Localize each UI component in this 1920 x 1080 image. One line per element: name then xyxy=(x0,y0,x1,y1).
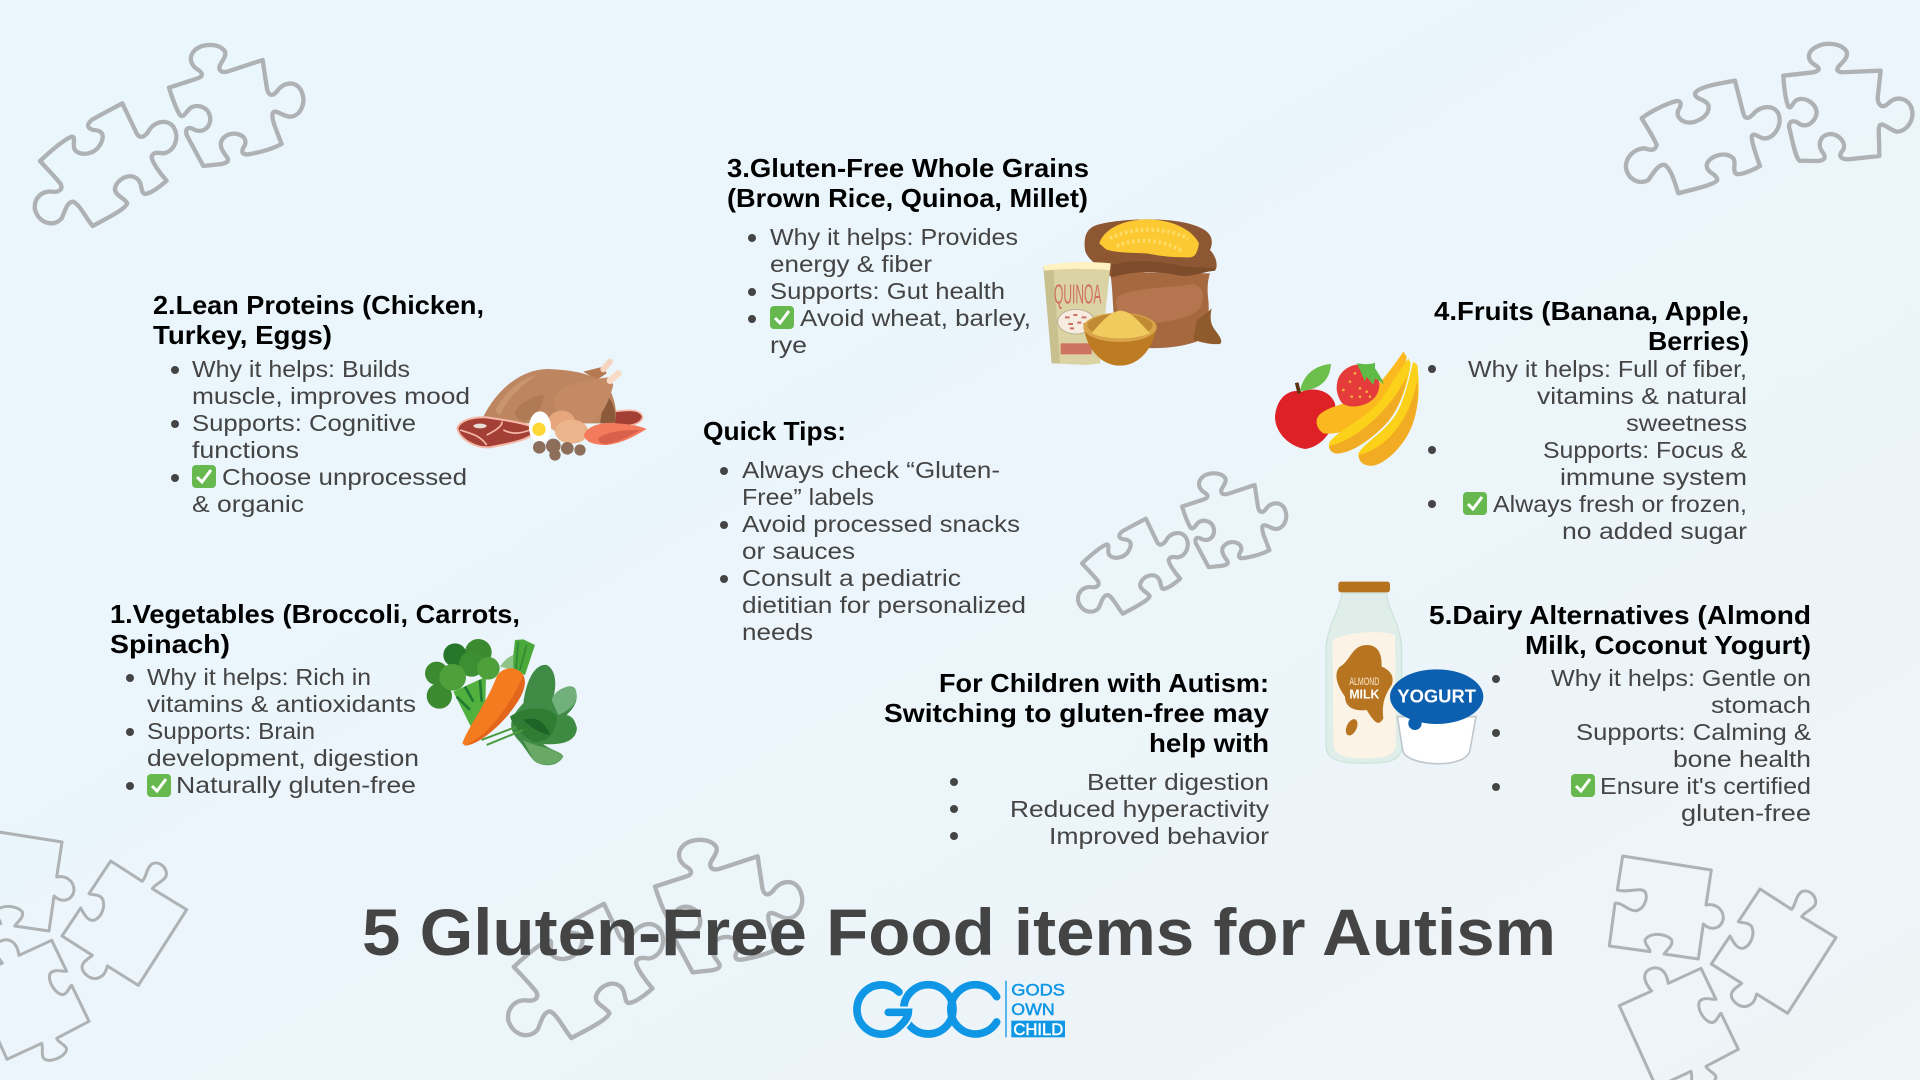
panel: 5 dairy alternatives xyxy=(1326,582,1811,826)
bullet list: quick tips: Consult a pediatric xyxy=(742,565,961,591)
bullet list: dairy alternatives: stomach xyxy=(1711,692,1811,718)
bullet list: quick tips: needs xyxy=(742,619,813,645)
logo: Gods Own Child xyxy=(857,981,1065,1039)
panel: 4 fruits xyxy=(1275,296,1749,544)
bullet list: benefits xyxy=(950,769,1270,849)
bullet list: dairy alternatives: gluten-free xyxy=(1681,800,1811,826)
bullet list: dairy alternatives: Why it helps: Gentle on xyxy=(1551,665,1811,691)
icon: grain sack, quinoa pack and bowl xyxy=(1043,219,1221,366)
heading: vegetables: 1.Vegetables (Broccoli, Carrots, xyxy=(110,599,520,629)
heading: lean proteins: 2.Lean Proteins (Chicken, xyxy=(153,290,484,320)
bullet list: lean proteins: Supports: Cognitive xyxy=(192,410,416,436)
panel: quick tips xyxy=(703,416,1026,645)
bullet list: quick tips: dietitian for personalized xyxy=(742,592,1026,618)
heading: for children with autism: help with xyxy=(1149,728,1269,758)
icon: almond milk bottle and yogurt cup: YOGURT xyxy=(1397,685,1477,706)
heading: fruits: 4.Fruits (Banana, Apple, xyxy=(1434,296,1749,326)
bullet list: quick tips: Avoid processed snacks xyxy=(742,511,1020,537)
bullet list: lean proteins xyxy=(171,356,470,517)
bullet list: quick tips: Always check “Gluten- xyxy=(742,457,1000,483)
bullet list: dairy alternatives: Ensure it's certified xyxy=(1600,773,1811,799)
icon: broccoli, carrot and spinach xyxy=(425,639,577,765)
logo: Gods Own Child: GODS xyxy=(1011,981,1065,1000)
heading: fruits: Berries) xyxy=(1648,326,1749,356)
puzzle pieces: bottom right xyxy=(1609,856,1836,1080)
bullet list: lean proteins: & organic xyxy=(192,491,304,517)
bullet list: lean proteins: muscle, improves mood xyxy=(192,383,470,409)
bullet list: whole grains: Supports: Gut health xyxy=(770,278,1005,304)
panel: 3 whole grains xyxy=(727,153,1221,366)
logo: Gods Own Child: OWN xyxy=(1011,1000,1055,1019)
bullet list: lean proteins: functions xyxy=(192,437,299,463)
panel: 1 vegetables xyxy=(110,599,577,798)
puzzle pieces: behind title xyxy=(508,840,802,1038)
bullet list: lean proteins: Choose unprocessed xyxy=(222,464,467,490)
panel: for children with autism xyxy=(884,668,1270,849)
heading: dairy alternatives: Milk, Coconut Yogurt) xyxy=(1525,630,1811,660)
bullet list: fruits: Supports: Focus & xyxy=(1543,437,1747,463)
bullet list: dairy alternatives: bone health xyxy=(1673,746,1811,772)
bullet list: vegetables: vitamins & antioxidants xyxy=(147,691,416,717)
heading: whole grains: (Brown Rice, Quinoa, Millet) xyxy=(727,183,1088,213)
heading: dairy alternatives xyxy=(1429,600,1811,660)
bullet list: whole grains: energy & fiber xyxy=(770,251,932,277)
heading: for children with autism: For Children with Autism: xyxy=(939,668,1269,698)
heading: fruits xyxy=(1434,296,1749,356)
heading: whole grains: 3.Gluten-Free Whole Grains xyxy=(727,153,1089,183)
bullet list: benefits: Improved behavior xyxy=(1049,823,1269,849)
bullet list: fruits: Always fresh or frozen, xyxy=(1493,491,1747,517)
bullet list: dairy alternatives xyxy=(1492,665,1811,826)
puzzle pieces: top left xyxy=(35,45,303,226)
bullet list: quick tips: Free” labels xyxy=(742,484,874,510)
bullet list: whole grains: Why it helps: Provides xyxy=(770,224,1018,250)
icon: almond milk bottle and yogurt cup xyxy=(1326,582,1483,764)
bullet list: fruits xyxy=(1428,356,1747,544)
bullet list: benefits: Reduced hyperactivity xyxy=(1010,796,1270,822)
bullet list: lean proteins: Why it helps: Builds xyxy=(192,356,410,382)
icon: apple, strawberry and bananas xyxy=(1275,352,1419,466)
icon: grain sack, quinoa pack and bowl: QUINOA xyxy=(1054,278,1102,309)
bullet list: vegetables xyxy=(126,664,419,798)
bullet list: whole grains: rye xyxy=(770,332,807,358)
bullet list: whole grains xyxy=(748,224,1031,358)
heading: whole grains xyxy=(727,153,1089,213)
bullet list: benefits: Better digestion xyxy=(1087,769,1269,795)
bullet list: vegetables: Why it helps: Rich in xyxy=(147,664,371,690)
bullet list: vegetables: Naturally gluten-free xyxy=(176,772,416,798)
icon: almond milk bottle and yogurt cup: ALMOND xyxy=(1349,676,1379,688)
heading: lean proteins xyxy=(153,290,484,350)
heading: vegetables xyxy=(110,599,520,659)
heading: dairy alternatives: 5.Dairy Alternatives (Almond xyxy=(1429,600,1811,630)
heading: vegetables: Spinach) xyxy=(110,629,230,659)
bullet list: quick tips xyxy=(720,457,1026,645)
heading: quick tips: Quick Tips: xyxy=(703,416,846,446)
bullet list: fruits: sweetness xyxy=(1626,410,1747,436)
heading: lean proteins: Turkey, Eggs) xyxy=(153,320,332,350)
heading: for children with autism: Switching to gluten-free may xyxy=(884,698,1270,728)
title: 5 Gluten-Free Food items for Autism xyxy=(362,895,1556,969)
bullet list: fruits: immune system xyxy=(1560,464,1747,490)
bullet list: vegetables: Supports: Brain xyxy=(147,718,315,744)
heading: for children with autism xyxy=(884,668,1270,758)
icon: almond milk bottle and yogurt cup: MILK xyxy=(1349,687,1380,701)
bullet list: fruits: no added sugar xyxy=(1562,518,1747,544)
bullet list: quick tips: or sauces xyxy=(742,538,855,564)
logo: Gods Own Child: CHILD xyxy=(1013,1020,1063,1039)
bullet list: vegetables: development, digestion xyxy=(147,745,419,771)
puzzle pieces: bottom left xyxy=(0,828,187,1060)
bullet list: fruits: vitamins & natural xyxy=(1537,383,1747,409)
bullet list: whole grains: Avoid wheat, barley, xyxy=(800,305,1031,331)
panel: 2 lean proteins xyxy=(153,290,647,517)
icon: roast turkey, steak, egg and salmon xyxy=(457,362,647,461)
bullet list: dairy alternatives: Supports: Calming & xyxy=(1576,719,1811,745)
puzzle pieces: centre right xyxy=(1078,473,1286,614)
bullet list: fruits: Why it helps: Full of fiber, xyxy=(1468,356,1747,382)
puzzle pieces: top right xyxy=(1626,44,1912,193)
